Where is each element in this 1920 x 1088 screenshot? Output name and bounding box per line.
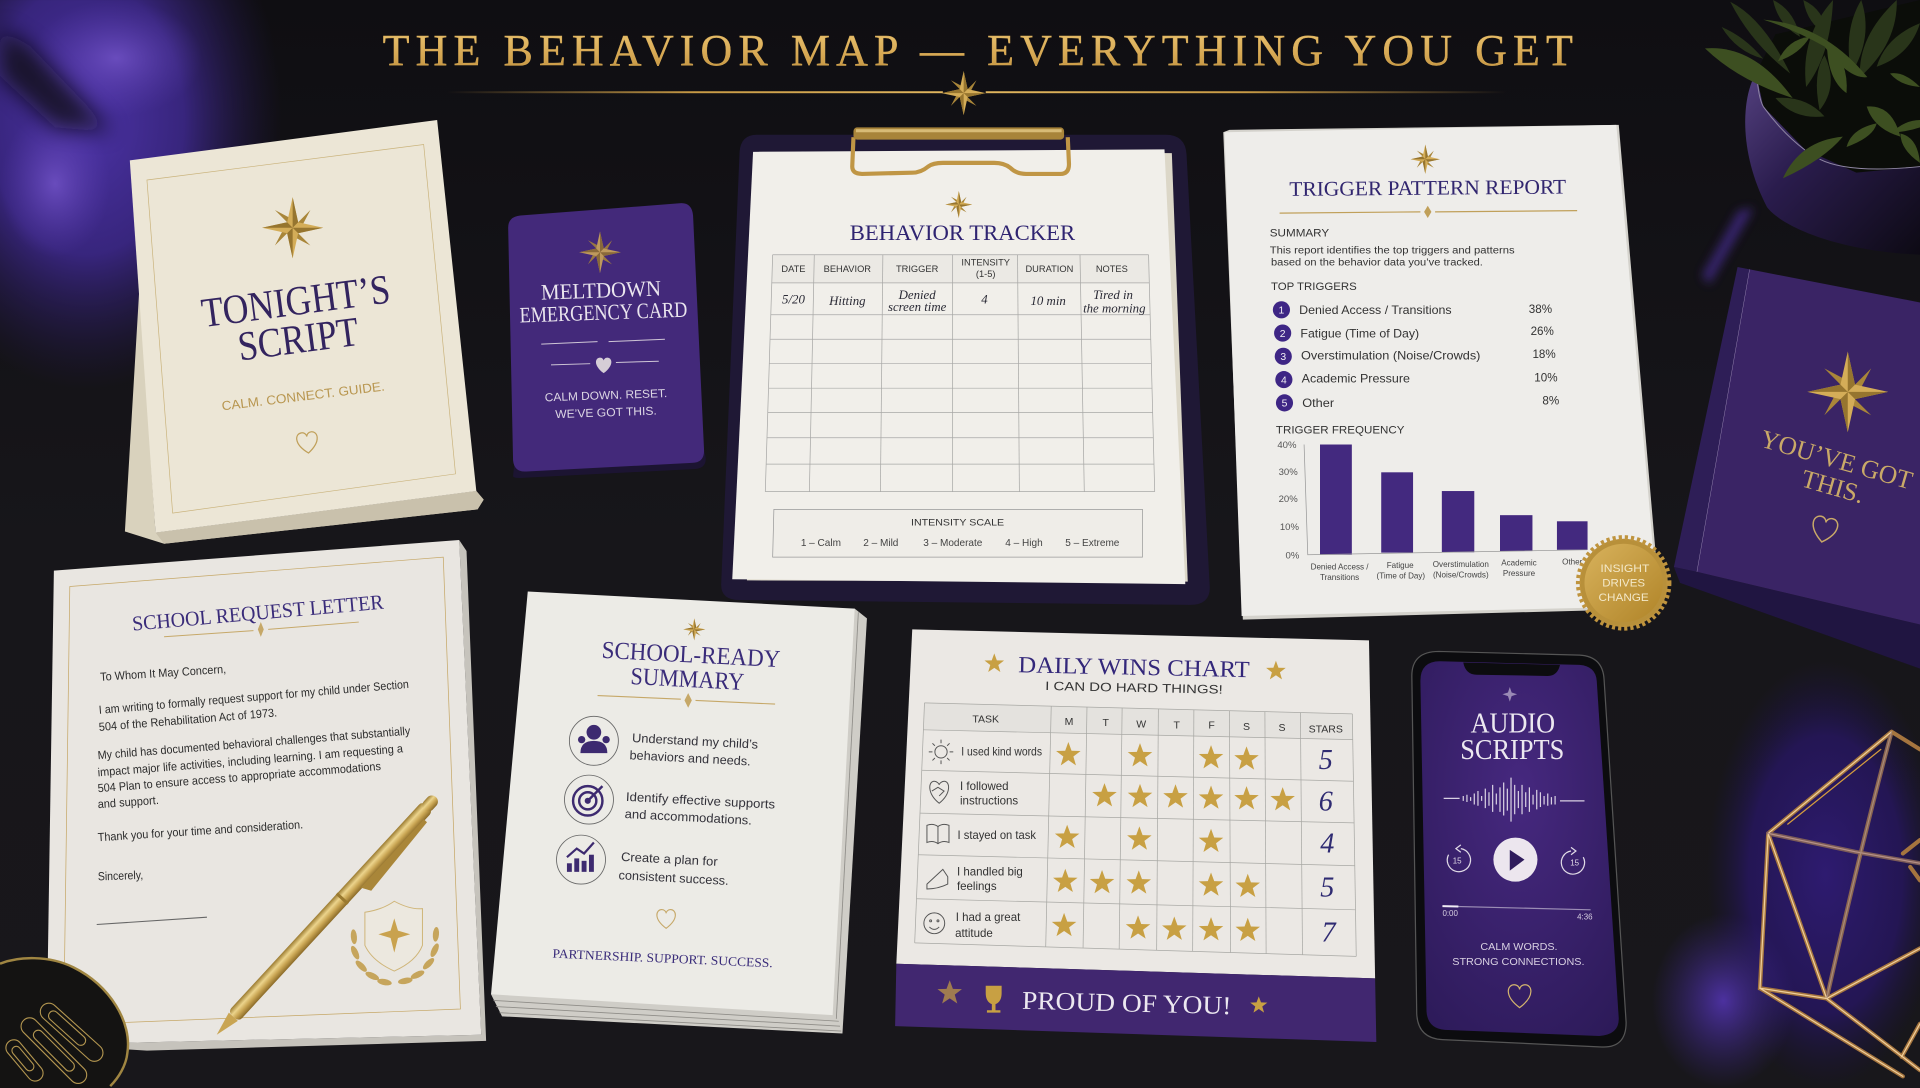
summary text: TOP TRIGGERS (1271, 281, 1357, 293)
handwritten row: Hitting (828, 294, 866, 308)
bar chart: trigger frequency: Fatigue (1387, 561, 1414, 570)
phone heading (1460, 708, 1564, 766)
summary points: Identify effective supports (626, 790, 775, 812)
intensity scale box: 2 – Mild (863, 538, 898, 549)
task labels: I handled big (957, 867, 1023, 879)
letter body: and support. (97, 794, 159, 811)
phone heading: SCRIPTS (1460, 735, 1564, 766)
day headers: F (1208, 720, 1215, 732)
bar chart: trigger frequency: Academic (1501, 559, 1537, 568)
summary points: behaviors and needs. (629, 748, 751, 769)
day headers: W (1136, 718, 1146, 730)
ranked trigger list: Overstimulation (Noise/Crowds) (1301, 348, 1480, 362)
ranked trigger list: 2 (1280, 329, 1286, 340)
summary text: SUMMARY (1270, 227, 1330, 239)
letter body: 504 of the Rehabilitation Act of 1973. (98, 706, 278, 734)
intensity scale box: 4 – High (1005, 538, 1043, 549)
letter body: I am writing to formally request support for my child under Section (98, 678, 409, 717)
chart heading: DAILY WINS CHART (1018, 652, 1250, 683)
panel: Behavior Tracker clipboard (721, 127, 1210, 605)
intensity scale box: 3 – Moderate (923, 538, 983, 549)
handwritten row: screen time (888, 300, 947, 314)
handwritten row: the morning (1083, 301, 1146, 315)
icon: crest with laurels (349, 901, 441, 986)
report heading: TRIGGER PATTERN REPORT (1289, 175, 1566, 201)
task labels (955, 747, 1042, 940)
panel: Tonight's Script booklet (125, 120, 484, 544)
summary points: consistent success. (618, 868, 729, 888)
card heading: EMERGENCY CARD (519, 297, 688, 328)
bar chart: trigger frequency: (Time of Day) (1377, 572, 1425, 581)
star totals (1319, 745, 1338, 949)
intensity scale box: INTENSITY SCALE (911, 517, 1004, 528)
task labels: attitude (955, 928, 993, 940)
handwritten row: Denied (898, 288, 936, 302)
summary divider (598, 694, 775, 707)
task icons (924, 740, 953, 934)
panel: Trigger Pattern Report (1223, 125, 1660, 620)
plant in purple pot (1705, 0, 1920, 255)
card tagline: CALM DOWN. RESET. (545, 387, 667, 404)
icon: bowl of paperclips (0, 958, 128, 1088)
letter body: My child has documented behavioral challenges that substantially (97, 725, 411, 762)
handwritten row: Tired in (1093, 288, 1133, 302)
summary text: based on the behavior data you’ve tracked. (1271, 257, 1483, 269)
ranked trigger list: 1 (1279, 305, 1285, 316)
summary points: Create a plan for (621, 850, 718, 869)
ranked trigger list: 38% (1529, 303, 1552, 316)
table header labels (781, 258, 1128, 279)
summary points: and accommodations. (624, 807, 752, 828)
icon: gold pen (211, 792, 448, 1046)
card heading: MELTDOWN (541, 275, 661, 305)
intensity scale box (773, 509, 1142, 557)
ranked trigger list: Academic Pressure (1302, 372, 1410, 386)
bar chart: trigger frequency: Overstimulation (1433, 560, 1489, 569)
ranked trigger list: 4 (1281, 375, 1287, 386)
icon: heart (1508, 985, 1531, 1008)
panel: Daily Wins Chart (895, 629, 1376, 1042)
day headers: S (1279, 722, 1286, 734)
table header labels: DATE (781, 264, 806, 274)
table header labels: (1-5) (976, 269, 996, 279)
ranked trigger list: Other (1302, 396, 1334, 410)
icon: gold seal (1578, 538, 1669, 628)
letter body: Thank you for your time and consideration. (97, 818, 303, 844)
task labels: I had a great (956, 912, 1021, 924)
icon: gold seal: INSIGHT (1600, 563, 1650, 575)
day headers: T (1174, 720, 1181, 732)
star totals: 5 (1319, 745, 1333, 776)
bar chart: trigger frequency: Other (1562, 558, 1583, 567)
progress bar: 4:36 (1577, 913, 1593, 922)
summary points: Understand my child’s (632, 731, 758, 752)
letter body (97, 663, 411, 883)
bar chart: trigger frequency: 40% (1277, 440, 1297, 451)
icon: compass star (1807, 351, 1888, 432)
booklet heading: TONIGHT’S (199, 267, 393, 337)
bar chart: trigger frequency: 30% (1279, 467, 1298, 478)
signature line (97, 917, 207, 925)
letter heading: SCHOOL REQUEST LETTER (131, 590, 385, 636)
icon: heart (296, 431, 319, 454)
task labels: feelings (957, 881, 997, 893)
phone tagline (1452, 941, 1584, 968)
icon: heart (1810, 515, 1839, 544)
panel: Meltdown Emergency Card (508, 203, 706, 478)
icon: compass star (262, 197, 323, 258)
icon: target in circle (564, 775, 613, 824)
box message: YOU’VE GOT (1757, 424, 1916, 495)
panel: School-Ready Summary (491, 591, 867, 1033)
booklet heading (199, 267, 393, 370)
icon: gold clip (852, 127, 1069, 174)
ranked trigger list: Denied Access / Transitions (1299, 303, 1452, 317)
bar chart: trigger frequency: Transitions (1320, 573, 1359, 582)
icon: people in circle (569, 716, 618, 765)
intensity scale box: 5 – Extreme (1065, 538, 1120, 549)
bar chart: trigger frequency: 10% (1280, 522, 1299, 533)
day headers (972, 713, 1343, 735)
phone heading: AUDIO (1471, 708, 1555, 739)
task labels: I stayed on task (958, 830, 1036, 842)
waveform (1444, 778, 1584, 822)
report divider (1280, 206, 1577, 218)
ranked trigger list (1273, 301, 1559, 411)
earned stars (1052, 742, 1295, 941)
icon: gold seal: DRIVES (1602, 578, 1645, 590)
table header labels: TRIGGER (896, 264, 939, 274)
letter body: Sincerely, (98, 869, 143, 883)
table header labels: NOTES (1096, 264, 1128, 274)
table header labels: DURATION (1025, 264, 1073, 274)
ranked trigger list: 8% (1542, 395, 1559, 408)
progress bar (1442, 906, 1593, 922)
summary heading (601, 637, 781, 696)
icon: heart (657, 910, 675, 928)
playback controls: 15 (1570, 859, 1580, 868)
icon: heart (596, 358, 611, 373)
ranked trigger list: 18% (1532, 348, 1556, 361)
summary heading: SUMMARY (630, 663, 745, 696)
letter body: To Whom It May Concern, (100, 663, 226, 684)
task labels: instructions (960, 796, 1018, 808)
chart heading: TRIGGER FREQUENCY (1276, 424, 1405, 436)
banner: Proud of You (937, 980, 1267, 1020)
ranked trigger list: 5 (1282, 399, 1288, 410)
star totals: 4 (1320, 828, 1334, 859)
letter body: 504 Plan to ensure access to appropriate accommodations (97, 760, 382, 795)
panel: School Request Letter (47, 540, 486, 1051)
phone tagline: STRONG CONNECTIONS. (1452, 956, 1584, 968)
table header labels: INTENSITY (961, 258, 1010, 268)
bar chart: trigger frequency: (Noise/Crowds) (1433, 570, 1489, 579)
card tagline (545, 387, 667, 421)
icon: star (579, 231, 621, 273)
ranked trigger list: Fatigue (Time of Day) (1300, 326, 1419, 340)
task labels: I used kind words (961, 747, 1042, 759)
ranked trigger list: 3 (1280, 352, 1286, 363)
ranked trigger list: 10% (1534, 371, 1558, 384)
summary text: This report identifies the top triggers and patterns (1270, 244, 1515, 256)
handwritten row: 5/20 (782, 293, 805, 307)
summary footer: PARTNERSHIP. SUPPORT. SUCCESS. (552, 947, 773, 970)
icon: growth chart in circle (557, 835, 606, 884)
day headers: T (1102, 717, 1109, 729)
day headers: TASK (972, 713, 999, 725)
handwritten row: 4 (981, 293, 988, 307)
tracker table (765, 255, 1155, 492)
day headers: STARS (1309, 723, 1343, 735)
title: THE BEHAVIOR MAP — EVERYTHING YOU GET (383, 26, 1579, 75)
handwritten row: 10 min (1030, 294, 1066, 308)
icon: gold seal: CHANGE (1599, 592, 1649, 604)
card heading (519, 275, 688, 328)
progress bar: 0:00 (1442, 909, 1458, 918)
chart subtitle: I CAN DO HARD THINGS! (1045, 679, 1223, 697)
chart table (915, 703, 1356, 956)
card divider (541, 339, 665, 365)
booklet heading: SCRIPT (235, 309, 361, 370)
icon: star (683, 618, 705, 640)
star totals: 5 (1320, 872, 1334, 903)
panel: Audio Scripts phone (1412, 651, 1626, 1047)
day headers: S (1243, 721, 1250, 733)
icon: star (1411, 145, 1440, 174)
letter body: impact major life activities, including learning. I am requesting a (97, 742, 404, 779)
day headers: M (1065, 716, 1073, 728)
phone tagline: CALM WORDS. (1480, 941, 1558, 953)
table header labels: BEHAVIOR (824, 264, 871, 274)
tracker heading: BEHAVIOR TRACKER (850, 220, 1075, 245)
star totals: 7 (1322, 918, 1338, 949)
banner: Proud of You: PROUD OF YOU! (1022, 986, 1232, 1020)
icon: star (945, 191, 972, 218)
gold geometric ornament (1760, 732, 1920, 1076)
bar chart: trigger frequency: 20% (1279, 494, 1298, 505)
summary points (618, 731, 775, 888)
playback controls: 15 (1453, 856, 1462, 865)
ranked trigger list: 26% (1531, 325, 1554, 338)
bar chart: trigger frequency: Pressure (1503, 569, 1536, 578)
handwritten row (782, 288, 1146, 315)
star totals: 6 (1319, 787, 1333, 818)
task labels: I followed (960, 781, 1009, 793)
title divider with star (447, 71, 1506, 115)
panel: You've Got This box (1674, 267, 1920, 669)
playback controls (1447, 838, 1585, 882)
box message: THIS. (1798, 464, 1868, 509)
summary text (1270, 227, 1515, 293)
heading stars (984, 653, 1286, 679)
bar chart: trigger frequency: Denied Access / (1311, 562, 1369, 571)
summary heading: SCHOOL-READY (601, 637, 781, 673)
card tagline: WE’VE GOT THIS. (555, 405, 657, 421)
bar chart: trigger frequency (1277, 440, 1588, 582)
letter divider (164, 622, 359, 637)
icon: star (1502, 687, 1517, 702)
intensity scale box: 1 – Calm (801, 538, 841, 549)
tagline: CALM. CONNECT. GUIDE. (221, 379, 385, 413)
bar chart: trigger frequency: 0% (1286, 550, 1300, 561)
